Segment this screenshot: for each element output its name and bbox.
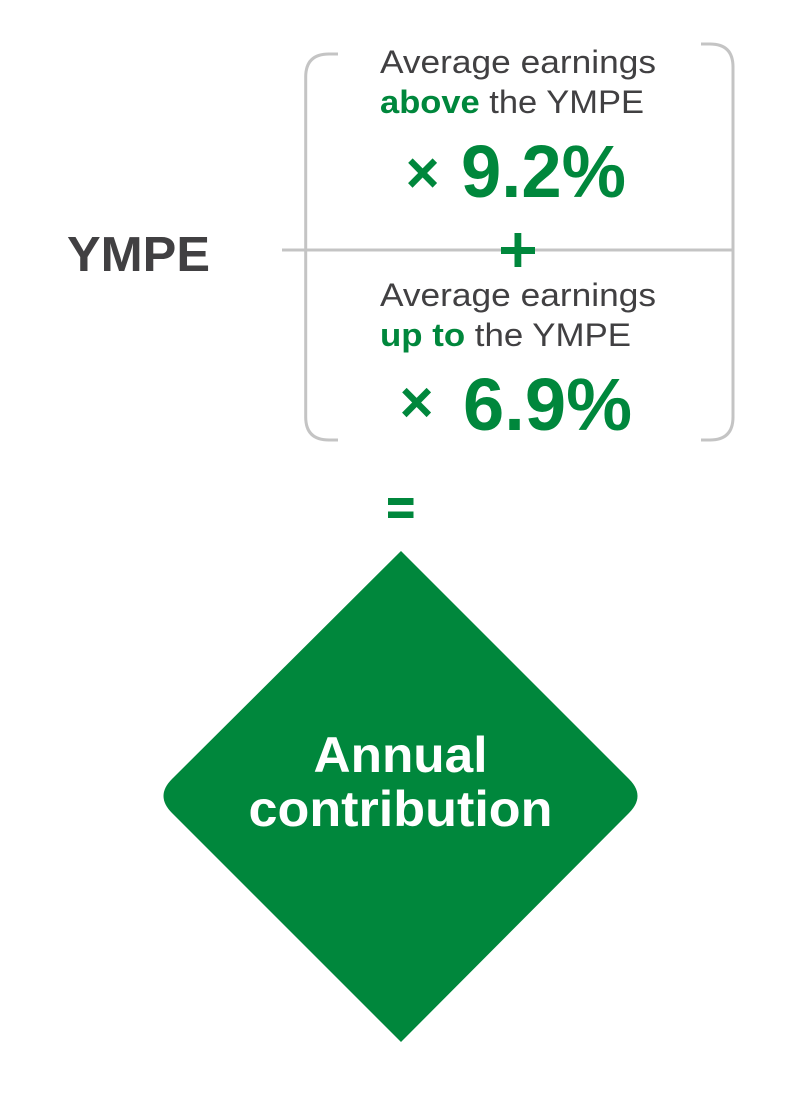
multiplier: times 6.9%: × [400,370,433,435]
term: average earnings up to the YMPE: up to the YMPE [380,317,631,353]
term: average earnings above the YMPE: above the YMPE [380,84,644,120]
term: average earnings above the YMPE: Average earnings [380,44,656,80]
equals sign [388,498,414,518]
term: average earnings up to the YMPE [380,277,656,446]
plus sign [501,233,535,267]
diamond: annual contribution [164,551,638,1042]
term: average earnings above the YMPE [380,44,656,213]
diamond: annual contribution: Annual [314,727,488,783]
multiplier: times 6.9%: 6.9% [463,363,632,446]
multiplier: times 9.2%: × [406,140,439,206]
label: YMPE: YMPE [67,228,210,282]
multiplier: times 9.2%: 9.2% [461,130,626,213]
term: average earnings up to the YMPE: Average earnings [380,277,656,313]
bracket: formula terms [282,44,733,440]
diamond: annual contribution: contribution [248,781,552,837]
